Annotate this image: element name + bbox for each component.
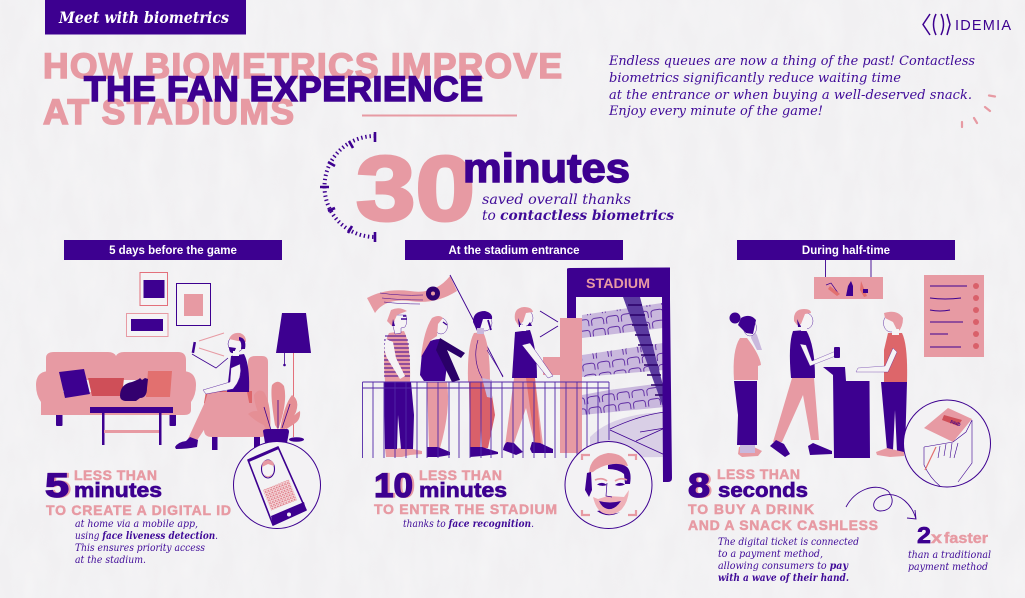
intro text: biometrics significantly reduce waiting time [609, 71, 901, 86]
intro text: Endless queues are now a thing of the past! Contactless [608, 54, 975, 69]
stat: 8 less than seconds: 8 [688, 467, 710, 505]
intro text: at the entrance or when buying a well-deserved snack. [609, 88, 972, 103]
man with phone [175, 333, 250, 449]
clock ticks [320, 132, 375, 242]
text: payment description [718, 537, 859, 584]
stat: 30 minutes saved: 30 [356, 138, 475, 240]
stat: 2x faster: 2 [917, 522, 931, 548]
stat: 2x faster: than a traditional [908, 550, 991, 561]
gate arch [567, 268, 672, 482]
stat: 2x faster [908, 522, 991, 573]
logo: IDEMIA: IDEMIA [955, 18, 1011, 34]
text: payment description: to a payment method, [718, 549, 823, 560]
stat: 8 less than seconds: LESS THAN [717, 466, 800, 482]
logo: IDEMIA [923, 14, 1011, 35]
text: digital ID description [75, 519, 218, 566]
title [43, 46, 562, 132]
text: digital ID description: This ensures priority access [75, 543, 205, 554]
fan 2 [420, 316, 465, 457]
stat: 5 less than minutes: 5 [47, 467, 71, 505]
hanging sign [814, 260, 883, 299]
stat: 8 less than seconds: AND A SNACK CASHLESS [688, 517, 878, 533]
stat: 30 minutes saved [320, 132, 674, 242]
stat: 5 less than minutes: TO CREATE A DIGITAL ID [46, 502, 231, 518]
fan 1 [384, 308, 422, 457]
stat: 8 less than seconds: TO BUY A DRINK [688, 501, 814, 517]
section header: At the stadium entrance [405, 240, 623, 260]
woman in queue [730, 312, 762, 457]
stat: 30 minutes saved: to contactless biometrics [482, 208, 674, 224]
entry post [543, 318, 582, 453]
text: digital ID description: at home via a mobile app, [75, 519, 198, 530]
title: THE FAN EXPERIENCE [84, 69, 483, 109]
text: payment description: with a wave of their hand. [718, 573, 849, 584]
text: payment description: The digital ticket is connected [718, 537, 859, 548]
section header: 5 days before the game [64, 240, 282, 260]
intro text [608, 54, 975, 119]
stat: 5 less than minutes: 5 [45, 467, 69, 505]
circle: contactless payment: PAID [950, 419, 962, 427]
illustration: living room [36, 272, 311, 450]
stat: 30 minutes saved: minutes [463, 145, 630, 191]
scan brackets [582, 455, 636, 515]
arrow: curly to 2x [846, 487, 916, 519]
badge: Meet with biometrics [45, 0, 246, 34]
badge: Meet with biometrics: Meet with biometrics [58, 8, 229, 27]
fan 4 [503, 307, 553, 455]
flag [367, 275, 503, 377]
stat: 2x faster: faster [944, 530, 988, 547]
stat: 10 less than minutes [374, 467, 557, 517]
railing [362, 382, 609, 458]
text: digital ID description: at the stadium. [75, 555, 146, 566]
stat: 30 minutes saved: saved overall thanks [482, 192, 631, 208]
stat: 5 less than minutes [45, 467, 231, 518]
face [589, 454, 630, 516]
QR code [263, 480, 297, 510]
coffee table [90, 407, 173, 445]
plant [248, 382, 300, 443]
decorative pink dashes [962, 96, 995, 127]
intro text: Enjoy every minute of the game! [608, 104, 823, 119]
menu board [924, 275, 984, 357]
text: payment description: allowing consumers to pay [718, 561, 849, 572]
barman [856, 312, 907, 457]
wall pictures [126, 272, 210, 336]
stands [582, 297, 665, 458]
stat: 5 less than minutes: LESS THAN [74, 467, 157, 483]
sight lines [540, 311, 558, 337]
customer [770, 309, 840, 457]
illustration: snack bar [730, 260, 984, 458]
stat: 5 less than minutes: minutes [74, 479, 162, 502]
counter [823, 367, 870, 458]
title: HOW BIOMETRICS IMPROVE [43, 46, 562, 86]
section header: During half-time [737, 240, 955, 260]
stat: 8 less than seconds [688, 466, 878, 533]
section header: 5 days before the game: 5 days before the game [109, 245, 237, 257]
text: digital ID description: using face liveness detection. [75, 531, 218, 542]
illustration: stadium gate [362, 268, 672, 482]
title: AT STADIUMS [43, 92, 294, 132]
circle: face recognition [565, 442, 652, 528]
text: face recognition description: thanks to face recognition. [403, 519, 534, 530]
mini face [262, 460, 274, 478]
stat: 10 less than minutes: 10 [374, 467, 413, 505]
lamp [276, 313, 311, 442]
STADIUM label: STADIUM [586, 276, 650, 291]
stat: 10 less than minutes: 10 [376, 467, 415, 505]
stat: 2x faster: x [931, 530, 942, 547]
armchair [204, 356, 268, 450]
stat: 8 less than seconds: 8 [690, 467, 712, 505]
cat [120, 378, 148, 401]
stat: 10 less than minutes: LESS THAN [419, 467, 502, 483]
stat: 8 less than seconds: seconds [718, 479, 808, 502]
section header: During half-time: During half-time [802, 245, 890, 257]
stat: 10 less than minutes: TO ENTER THE STADIUM [374, 501, 557, 517]
fan 3 [468, 311, 503, 457]
sofa [36, 352, 196, 426]
section header: At the stadium entrance: At the stadium entrance [448, 245, 580, 257]
circle: phone with digital ID [234, 442, 320, 528]
stat: 2x faster: payment method [908, 562, 988, 573]
stat: 10 less than minutes: minutes [419, 479, 507, 502]
circle: contactless payment [904, 400, 990, 487]
